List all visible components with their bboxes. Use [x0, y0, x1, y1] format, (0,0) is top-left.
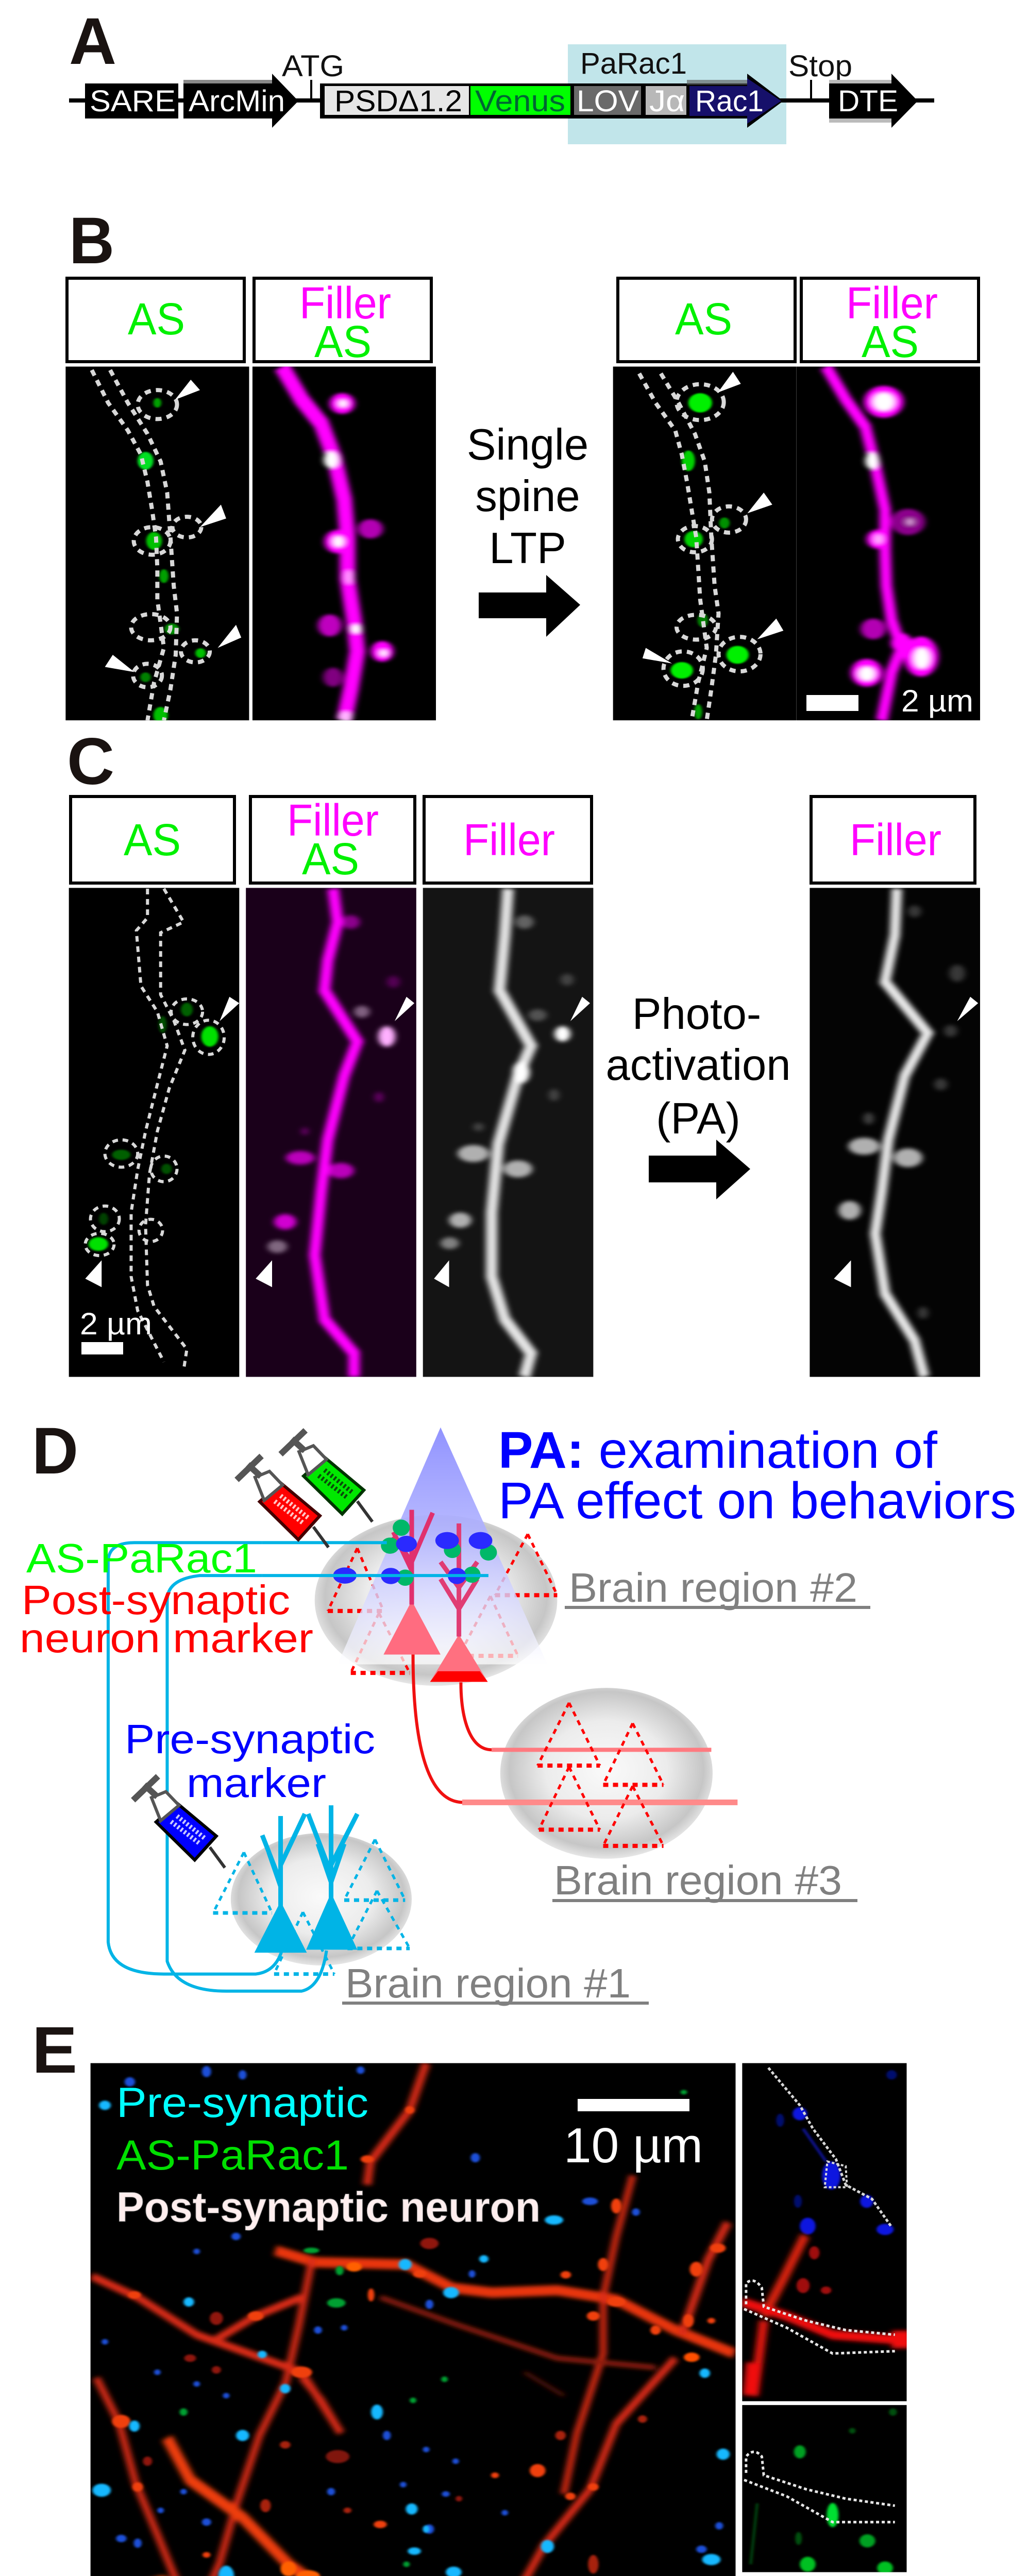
image: Filler gray	[423, 888, 593, 1377]
header box Filler AS: Filler	[287, 795, 379, 845]
pre-synaptic marker label	[125, 1716, 375, 1806]
header box AS before	[67, 278, 244, 362]
Single spine LTP text: Single	[467, 420, 588, 469]
Stop marker: Stop	[788, 49, 852, 83]
region 2 labelled neurons	[383, 1510, 488, 1682]
brain region 3 sphere	[500, 1688, 713, 1859]
scale bar C: 2 µm	[80, 1307, 152, 1341]
DTE arrow: DTE	[838, 84, 898, 118]
pre-synaptic marker label: marker	[187, 1760, 326, 1806]
ATG marker	[282, 49, 344, 100]
PaRac1 highlight	[568, 44, 786, 144]
Photo-activation text: activation	[605, 1041, 791, 1090]
label C: C	[67, 725, 114, 799]
cyan bright spots	[92, 2100, 736, 2576]
brain region 2 label: Brain region #2	[569, 1565, 857, 1611]
arrow C	[649, 1140, 750, 1199]
cyan projections	[108, 1543, 327, 1991]
header box Filler AS before: Filler	[299, 278, 391, 328]
panel E: microscopy	[32, 2013, 911, 2576]
region 2 dashed neurons	[328, 1534, 557, 1673]
syringe green	[281, 1430, 373, 1522]
header box Filler after	[811, 796, 975, 883]
syringe red	[237, 1456, 328, 1547]
header box Filler after: Filler	[850, 815, 941, 865]
Rac1 segment: Rac1	[695, 84, 764, 118]
Rac1 segment	[689, 78, 781, 124]
panel A: construct diagram	[69, 5, 934, 144]
heading PA effect: PA: examination of	[498, 1421, 937, 1479]
arrow B	[479, 575, 580, 637]
ATG marker: ATG	[282, 49, 344, 83]
Single spine LTP text	[467, 420, 588, 573]
syringe blue	[133, 1776, 225, 1868]
legend AS-PaRac1: AS-PaRac1	[116, 2132, 349, 2179]
dendrites	[92, 2063, 734, 2576]
scale bar B	[806, 684, 973, 718]
header box Filler AS	[250, 795, 415, 884]
scale bar E: 10 µm	[564, 2118, 703, 2173]
pre-synaptic marker label: Pre-synaptic	[125, 1716, 375, 1762]
panel B: single spine LTP	[65, 204, 980, 723]
red orange boutons	[112, 2106, 726, 2576]
scale bar B: 2 µm	[901, 684, 973, 718]
main fluorescence image	[91, 2063, 736, 2576]
legend pre-synaptic: Pre-synaptic	[116, 2079, 368, 2126]
heading PA effect	[498, 1421, 1016, 1530]
region 3 dashed neurons	[537, 1703, 664, 1846]
image: AS before	[65, 367, 249, 723]
header box Filler AS after: Filler	[846, 278, 938, 328]
inset: AS-PaRac1	[742, 2405, 907, 2574]
cyan line over dots	[262, 1543, 488, 1575]
synaptic dots	[333, 1520, 497, 1586]
header box Filler AS before	[254, 278, 431, 367]
panel D: circuit schematic	[20, 1414, 1016, 2006]
image: AS after	[613, 367, 797, 720]
Single spine LTP text: LTP	[489, 524, 566, 573]
label B: B	[69, 204, 114, 278]
Venus segment: Venus	[475, 84, 565, 118]
image: Filler AS	[246, 888, 416, 1377]
inset: presynaptic and postsynaptic	[742, 2063, 911, 2401]
image: Filler AS after	[797, 367, 980, 720]
header box Filler	[424, 796, 592, 883]
DTE arrow	[829, 74, 918, 128]
image: Filler AS before	[252, 367, 436, 722]
label E: E	[32, 2013, 77, 2087]
header box AS before: AS	[128, 294, 185, 344]
AS-PaRac1 label: AS-PaRac1	[26, 1535, 257, 1581]
post-synaptic marker label: Post-synaptic	[22, 1577, 290, 1623]
header box AS after	[618, 278, 795, 362]
region 1 dashed neurons	[213, 1839, 410, 1974]
red axons	[413, 1654, 737, 1802]
label D: D	[32, 1414, 78, 1488]
photoactivation light cone	[338, 1427, 547, 1665]
Single spine LTP text: spine	[475, 472, 580, 521]
image: AS	[69, 888, 239, 1377]
brain region 1 label: Brain region #1	[345, 1960, 631, 2006]
header box AS: AS	[124, 815, 181, 865]
image: Filler gray after	[810, 888, 980, 1377]
ArcMin arrow	[183, 74, 298, 128]
panel C: photoactivation	[67, 725, 980, 1377]
legend post-synaptic neuron: Post-synaptic neuron	[116, 2184, 541, 2231]
header box Filler AS after: AS	[862, 317, 919, 367]
header box AS after: AS	[675, 294, 732, 344]
Photo-activation text: Photo-	[632, 990, 761, 1039]
fusion protein bar	[320, 74, 783, 128]
Stop marker	[788, 49, 852, 100]
header box Filler: Filler	[463, 815, 555, 865]
green AS spots	[180, 2090, 703, 2576]
Photo-activation text: (PA)	[656, 1094, 740, 1143]
post-synaptic marker label: neuron marker	[20, 1615, 313, 1661]
post-synaptic marker label	[20, 1577, 313, 1661]
header box AS	[71, 796, 234, 883]
brain region 1 sphere	[231, 1833, 412, 1965]
brain region 2 sphere	[315, 1515, 557, 1686]
Photo-activation text	[605, 990, 791, 1143]
PSD segment: PSDΔ1.2	[334, 84, 462, 118]
PaRac1 label: PaRac1	[580, 47, 687, 80]
brain region 3 label: Brain region #3	[554, 1857, 842, 1903]
header box Filler AS after	[801, 278, 979, 367]
header box Filler AS: AS	[302, 834, 359, 884]
J-alpha segment: Jα	[649, 84, 685, 118]
ArcMin arrow: ArcMin	[189, 84, 285, 118]
heading PA effect: PA effect on behaviors	[498, 1472, 1016, 1530]
label A: A	[69, 5, 116, 78]
scale bar C	[80, 1307, 152, 1354]
LOV segment: LOV	[577, 84, 639, 118]
SARE block: SARE	[90, 84, 176, 118]
blue presynaptic spots	[102, 2066, 723, 2576]
header box Filler AS before: AS	[314, 317, 372, 367]
region 1 labelled neurons	[255, 1805, 357, 1953]
backbone line	[69, 98, 934, 103]
